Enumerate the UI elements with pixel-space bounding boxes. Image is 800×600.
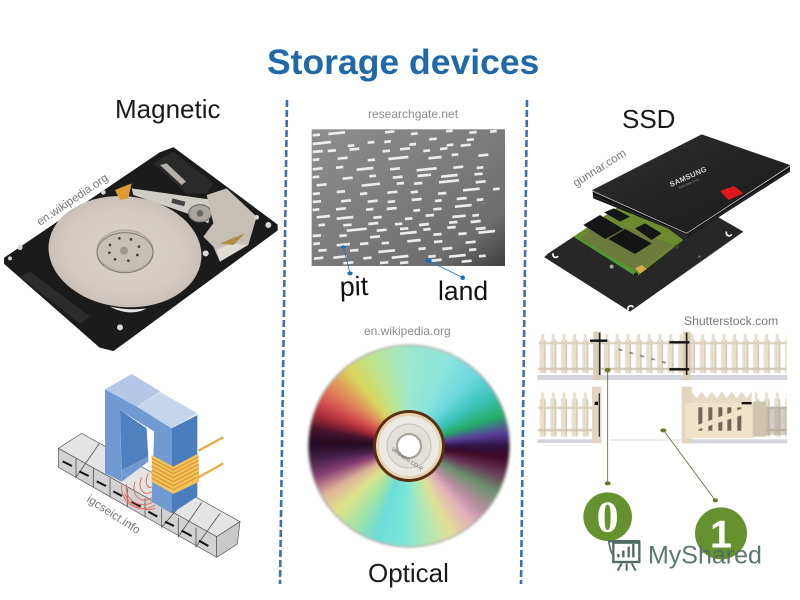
credit: en.wikipedia.org on hard disk: en.wikipedia.org xyxy=(35,172,111,228)
watermark: MyShared: MyShared xyxy=(648,541,762,569)
image: solid state drive xyxy=(543,134,790,312)
heading: SSD: SSD xyxy=(622,104,675,134)
watermark: MyShared xyxy=(608,540,762,571)
image: optical disc xyxy=(300,337,518,555)
credit: igcseict.info: igcseict.info xyxy=(84,493,143,537)
label: pit: pit xyxy=(339,271,369,302)
heading: Magnetic: Magnetic xyxy=(115,94,220,124)
divider: left dashed line xyxy=(280,100,287,584)
credit: researchgate.net: researchgate.net xyxy=(368,107,459,121)
credit: Shutterstock.com: Shutterstock.com xyxy=(684,314,778,328)
image: magnetic read head and tape xyxy=(58,374,240,557)
image: fence closed and open gate: 1 xyxy=(710,513,732,557)
heading: Optical: Optical xyxy=(368,558,449,588)
credit: en.wikipedia.org above disc: en.wikipedia.org xyxy=(364,324,451,338)
divider: right dashed line xyxy=(521,100,527,584)
image: optical disc: Verbatim CD-R xyxy=(390,447,424,473)
image: solid state drive: SAMSUNG xyxy=(668,164,708,189)
image: fence closed and open gate xyxy=(537,332,787,559)
image: solid state drive: Solid State Drive xyxy=(678,177,700,190)
image: pits and lands micrograph xyxy=(312,129,505,280)
image: fence closed and open gate: 0 xyxy=(597,493,619,542)
title: Storage devices xyxy=(267,42,539,82)
credit: gunnar.com: gunnar.com xyxy=(571,148,629,190)
image: hard disk drive xyxy=(5,148,277,350)
label: land: land xyxy=(438,276,488,306)
